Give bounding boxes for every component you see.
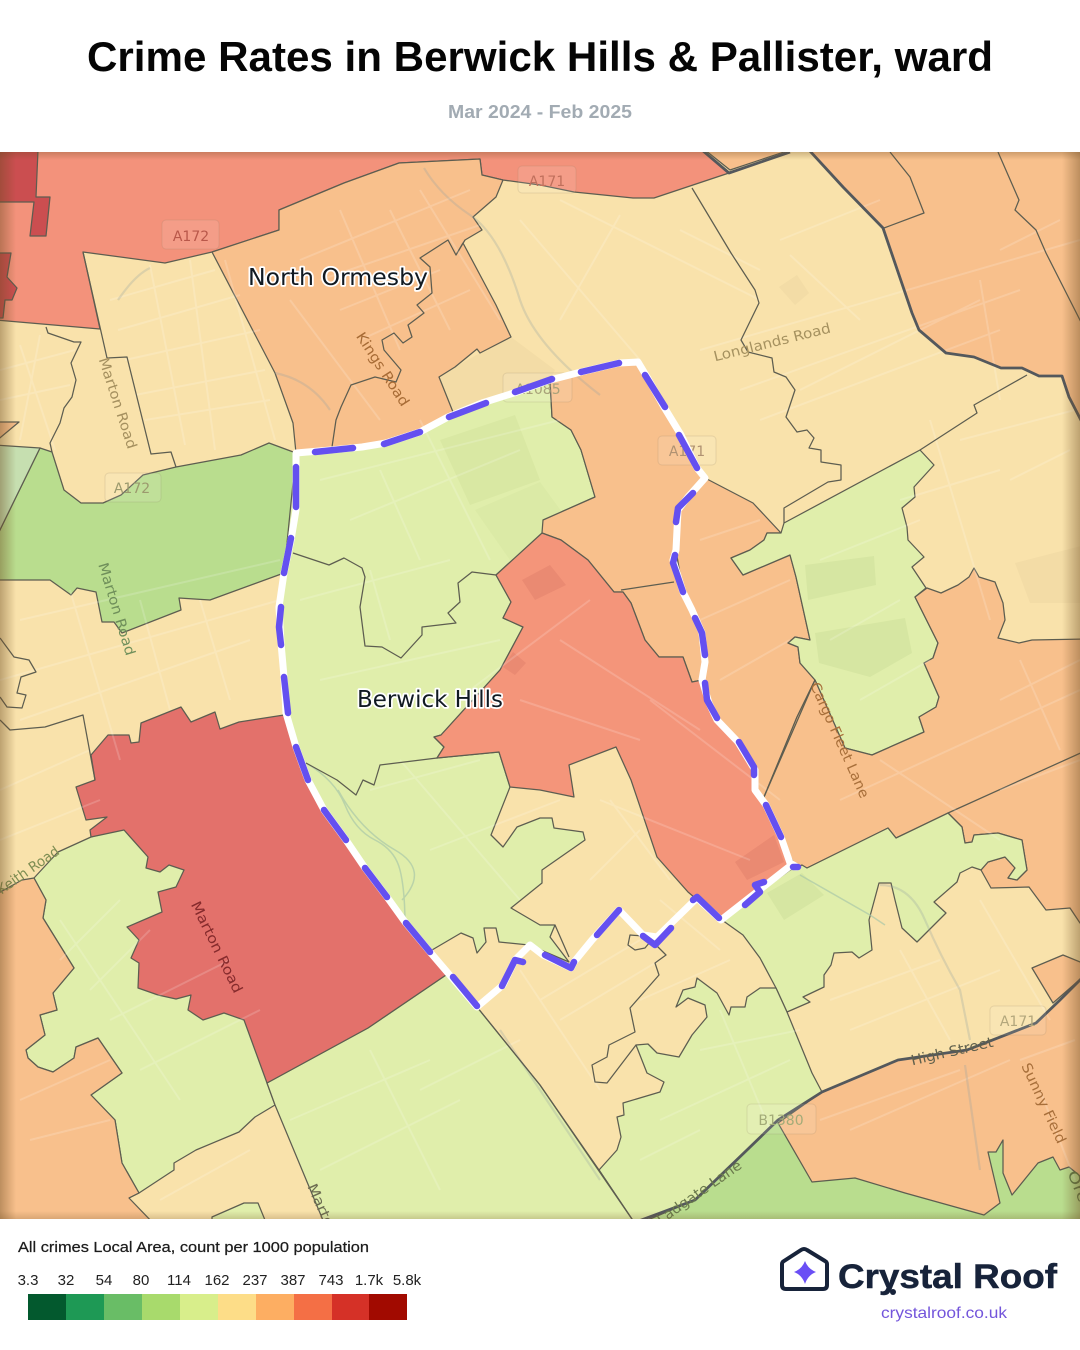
area: darker salmon patches [503,565,784,880]
map edge shading [0,152,1080,1219]
area: darker cream strip by A1085 [439,337,555,412]
street network texture [0,190,1080,1200]
area: ward north-east orange [542,362,705,682]
legend scale labels: 114 [167,1272,191,1289]
legend [18,1239,422,1320]
area: big east orange [764,568,1080,868]
area: darker cream patch east [1015,545,1080,603]
map base: cream areas [0,152,1080,1219]
legend scale labels [18,1272,422,1289]
area: ward west light green (Berwick Hills) [279,380,595,962]
area: dark red block A [0,150,50,236]
legend scale labels: 54 [96,1272,112,1289]
legend scale labels: 162 [204,1272,230,1289]
area: south-east orange block [778,975,1080,1215]
area: south-east orange [948,751,1080,925]
legend scale labels: 5.8k [393,1272,422,1289]
road shield: B1380: B1380 [758,1113,804,1129]
area: high-crime red [76,707,446,1083]
area: darker park patches in ward [440,415,540,505]
road label: Marton Road north: Marton Road [95,356,139,451]
area: darker cream patch north [779,275,809,305]
ward boundary: white base line [279,362,797,1007]
area: pale strip at west edge [0,445,40,540]
area: small light green at bottom [211,1202,266,1219]
area: small orange wedge west [0,422,19,442]
area: small orange at east edge [1032,955,1080,1003]
place label: North Ormesby: North Ormesby [248,265,428,291]
logo: Crystal Roof [782,1249,1058,1322]
icon: house with star [782,1249,827,1289]
area: east orange beside ward [676,478,815,797]
road shield: A1085: A1085 [515,382,561,398]
legend scale labels: 3.3 [18,1272,38,1289]
main road boundaries, thick [636,150,1080,1222]
area: south-east green park patch [767,873,824,920]
area: south-west light green [26,830,275,1194]
road label: Ladgate Lane: Ladgate Lane [654,1158,745,1228]
area: dark red block B [0,253,17,318]
area: ward central salmon [434,533,790,920]
road shield: A1085 [503,373,572,402]
area boundaries [0,152,1080,1225]
road shield: A171 top [518,166,576,193]
road label: Sunny Field: Sunny Field [1017,1061,1069,1146]
road shield: B1380 [747,1104,816,1134]
subtitle: date range: Mar 2024 - Feb 2025 [448,101,632,122]
road label: Marton Road west: Marton Road [94,561,138,658]
legend title: All crimes Local Area, count per 1000 population [18,1239,369,1256]
logo wordmark: Crystal Roof [838,1258,1058,1296]
area: top orange sliver [706,152,786,171]
area: south middle light green [599,978,822,1225]
road label: Marton Road in red area: Marton Road [187,899,245,996]
road shield: A172 north [162,220,219,249]
road label: Cargo Fleet Lane: Cargo Fleet Lane [806,680,872,801]
area: east darker green patches [805,556,912,677]
area: north-east orange [809,150,1080,428]
road label: High Street: High Street [910,1035,995,1069]
road label: Kings Road: Kings Road [352,330,412,410]
legend scale labels: 387 [280,1272,306,1289]
area: North Ormesby orange [212,159,511,453]
road shield: A171 top: A171 [529,174,565,190]
area: west green [0,443,296,633]
road shield: A172 north: A172 [173,229,209,245]
area: south-east light green [722,813,1027,1012]
road shield: A171 centre: A171 [669,444,705,460]
area: bottom centre light green [267,975,636,1225]
place label: Berwick Hills: Berwick Hills [357,687,503,713]
road shield: A171 centre [658,436,716,465]
grey rail lines [118,168,980,1180]
area: south-west orange [0,878,155,1225]
area: darker park patch in ward, lower [512,511,562,559]
legend scale labels: 743 [318,1272,344,1289]
logo url: crystalroof.co.uk [881,1305,1008,1322]
title: Crime Rates in Berwick Hills & Pallister, ward [87,33,993,80]
road label: Marton Road south: Marton Road [303,1181,359,1279]
area: north salmon band [0,150,729,329]
river lines [306,763,885,925]
road label: Longlands Road: Longlands Road [712,321,832,365]
legend scale labels: 237 [242,1272,268,1289]
ward boundary: purple dashes [279,363,798,1006]
legend colour bar [28,1294,407,1320]
legend scale labels: 32 [58,1272,74,1289]
legend scale labels: 1.7k [355,1272,384,1289]
road shield: A172 west [105,473,161,502]
legend scale labels: 80 [133,1272,149,1289]
road shield: A172 west: A172 [114,481,150,497]
road shield: A171 east: A171 [1000,1014,1036,1030]
area: south-east green below the road [636,1120,1080,1225]
logo dot under the y [890,1289,896,1295]
road shield: A171 east [990,1006,1046,1035]
area: east light green [731,450,939,755]
